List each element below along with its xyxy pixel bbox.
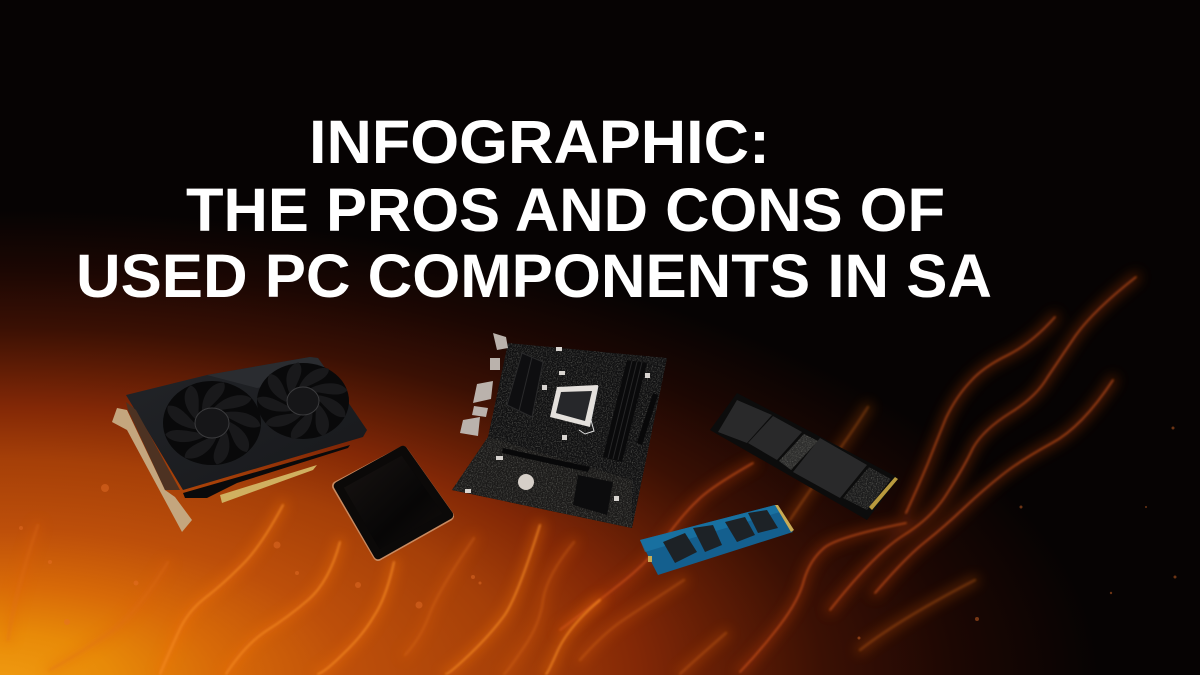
shroud top panel [207,357,330,388]
graphics card [112,352,367,532]
title [76,108,992,310]
M.2 SSD blue [640,505,794,575]
RAM slots [603,360,647,462]
title: USED PC COMPONENTS IN SA [76,242,992,310]
small white parts [465,347,650,501]
fan right [244,352,362,451]
heatsink fins [126,402,180,490]
CPU socket [550,385,598,434]
decoration: flame wisps [8,277,1136,674]
VRM heatsinks [507,353,543,417]
motherboard [452,333,667,528]
title: INFOGRAPHIC: [309,108,770,176]
IO ports [460,333,508,436]
fan left [163,381,261,465]
decoration: embers [19,426,1176,640]
metal bracket [112,408,192,532]
gold PCIe connector [220,465,317,503]
square chip [337,450,449,556]
title: THE PROS AND CONS OF [186,176,945,244]
card shroud [126,357,367,490]
CMOS battery [518,474,534,490]
PCIe slot right [637,393,658,445]
M.2 SSD black [710,393,898,520]
lower heatsink [573,475,613,515]
PCIe slot lower [502,448,590,472]
PCB underside [183,445,350,498]
